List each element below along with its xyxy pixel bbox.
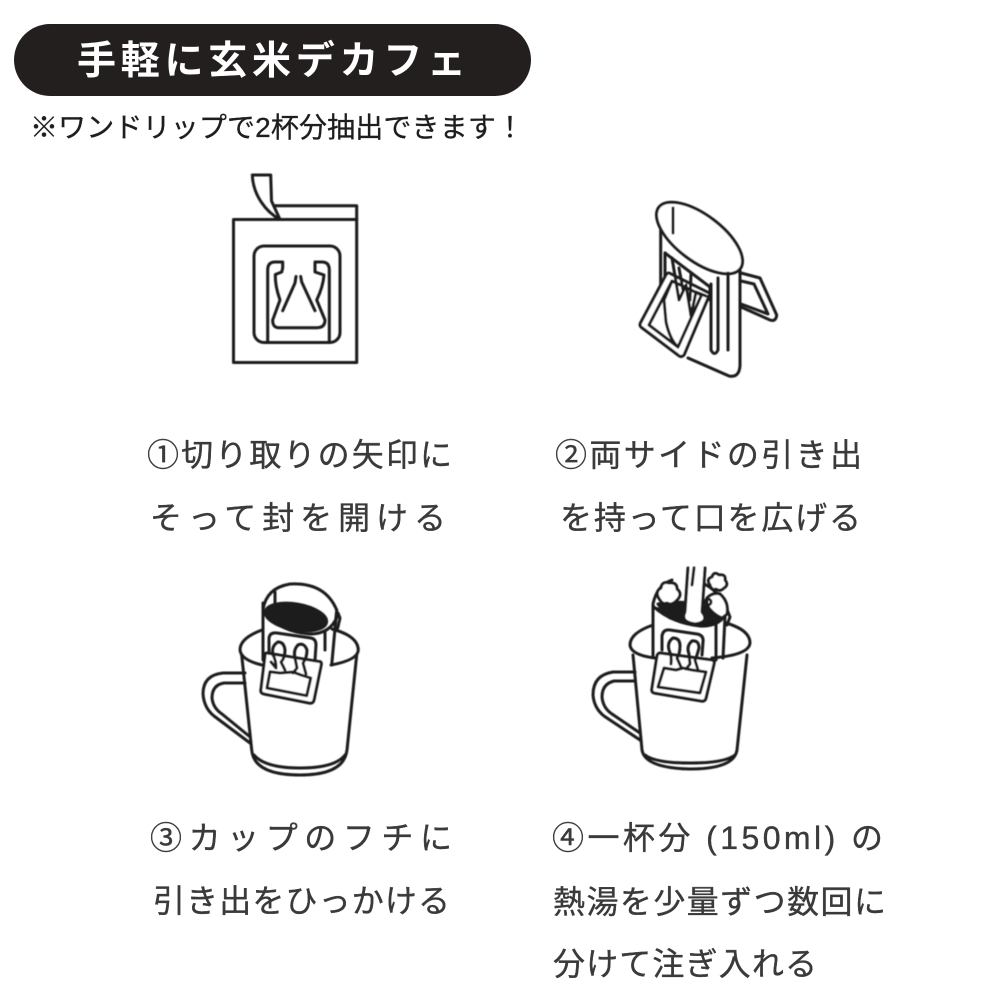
icon: opening the side handles — [640, 189, 777, 376]
step 1 text: ①切り取りの矢印に — [147, 437, 452, 473]
step 3 text: ③カップのフチに — [150, 820, 452, 856]
step 4 text: ④一杯分 (150ml) の — [552, 820, 883, 856]
step 1 text — [147, 437, 452, 536]
step 4 text — [552, 820, 886, 982]
step 4 text: 分けて注ぎ入れる — [553, 946, 817, 982]
step 4 text: 熱湯を少量ずつ数回に — [553, 884, 886, 920]
icon: hanging the filter on the cup — [203, 584, 358, 775]
title banner: 手軽に玄米デカフェ — [77, 39, 466, 83]
icon: pouring hot water — [593, 568, 750, 769]
step 1 text: そって封を開ける — [150, 500, 446, 536]
title banner — [14, 24, 531, 96]
step 2 text: を持って口を広げる — [560, 500, 861, 536]
icon: opening the packet — [234, 175, 357, 362]
step 2 text: ②両サイドの引き出 — [555, 437, 862, 473]
step 2 text — [555, 437, 862, 536]
step 3 text — [150, 820, 452, 919]
step 3 text: 引き出をひっかける — [153, 883, 450, 919]
note text: ※ワンドリップで2杯分抽出できます！ — [30, 112, 524, 143]
